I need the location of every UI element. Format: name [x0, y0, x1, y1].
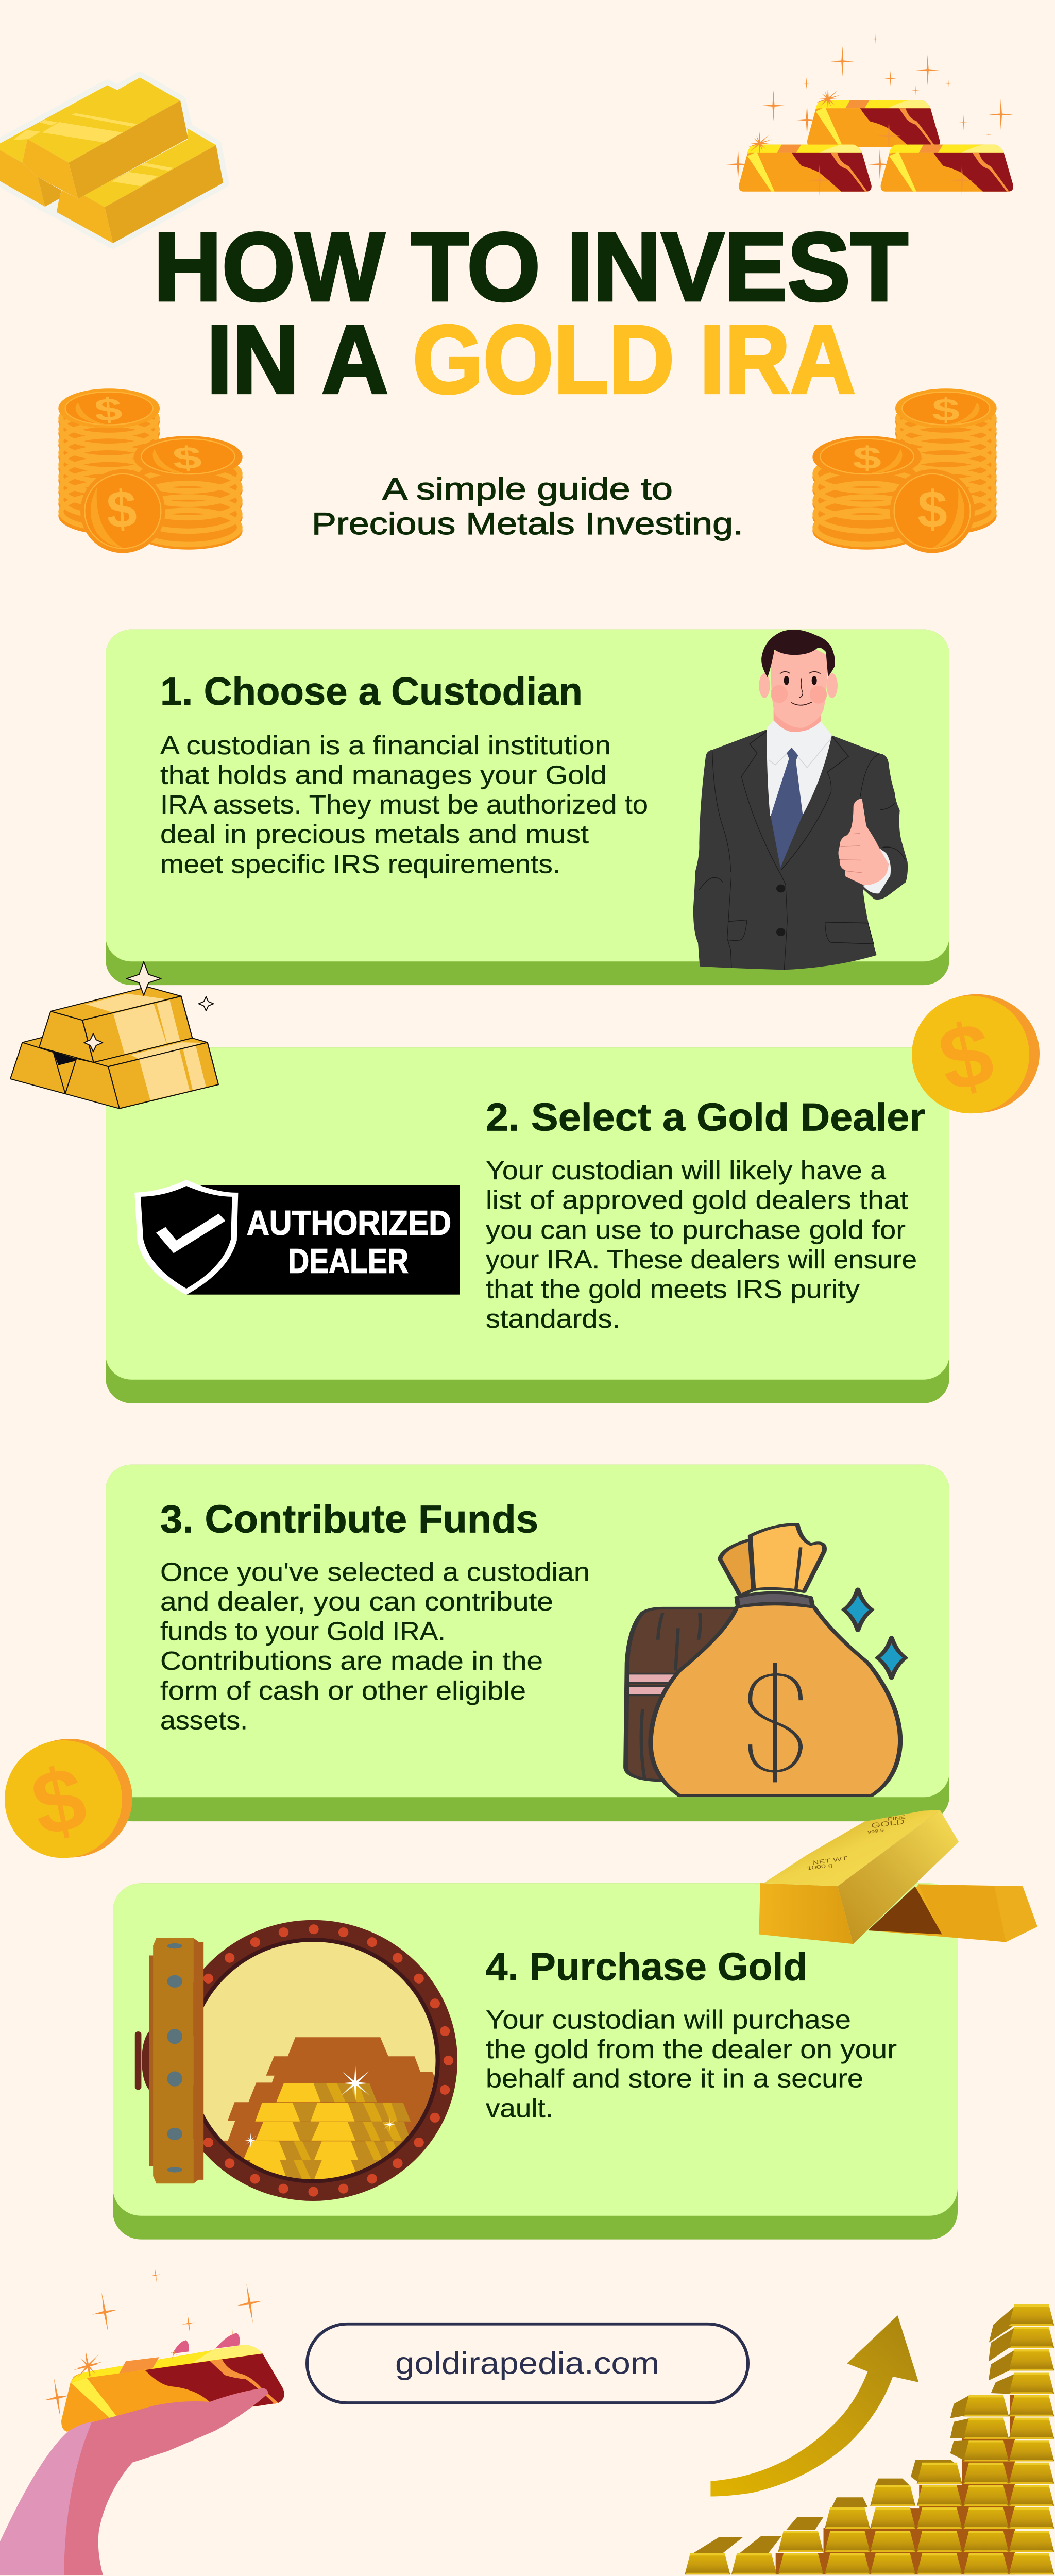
bag body	[651, 1604, 900, 1795]
body step 1: A custodian is a financial institution	[160, 730, 611, 760]
coin dollar signs left: $	[171, 439, 203, 476]
coin dollar sign: $	[930, 1003, 1001, 1111]
icon: top-right red and gold bars with sparkles	[726, 33, 1013, 196]
icon: shield with check	[134, 1180, 238, 1295]
heading step 2: 2. Select a Gold Dealer	[486, 1095, 925, 1139]
title	[154, 213, 908, 414]
vault door hinge	[149, 1938, 203, 2183]
coin dollar signs left	[93, 392, 203, 539]
panel: step 1 choose a custodian	[106, 630, 949, 985]
website text: goldirapedia.com	[395, 2346, 659, 2380]
icon: gold coin left	[5, 1739, 132, 1858]
sparkles above bar	[41, 2267, 266, 2420]
icon: gold bar staircase	[685, 2304, 1054, 2574]
body step 4: Your custodian will purchase	[486, 2005, 851, 2034]
panel face step 2	[106, 1047, 949, 1380]
body step 1: that holds and manages your Gold	[160, 760, 607, 789]
panel: step 3 contribute funds	[106, 1465, 949, 1821]
panel base step 2	[106, 1047, 949, 1403]
panel base step 1	[106, 630, 949, 985]
coin dollar signs left: $	[105, 479, 138, 539]
face features	[784, 676, 789, 685]
body step 2: your IRA. These dealers will ensure	[486, 1244, 917, 1274]
suit	[693, 730, 908, 970]
badge text line 2: DEALER	[288, 1242, 409, 1281]
body step 4: the gold from the dealer on your	[486, 2035, 897, 2064]
vault ring	[168, 1920, 457, 2201]
body step 2: Your custodian will likely have a	[486, 1156, 886, 1185]
icon: right coin stacks	[812, 388, 997, 553]
coin dollar signs right: $	[932, 393, 960, 428]
heading step 3: 3. Contribute Funds	[160, 1497, 538, 1541]
icon: money bag and wallet	[626, 1524, 906, 1795]
cuff and hand	[863, 848, 891, 893]
badge black band	[186, 1185, 460, 1295]
subtitle line 1: A simple guide to	[382, 471, 673, 506]
icon: left coin stacks	[58, 388, 243, 553]
bag dollar symbol	[750, 1663, 801, 1782]
icon: open vault with gold	[135, 1920, 457, 2201]
hand	[64, 2388, 268, 2575]
body step 3: and dealer, you can contribute	[160, 1587, 553, 1616]
panel: step 4 purchase gold	[113, 1883, 958, 2240]
body step 1: IRA assets. They must be authorized to	[160, 790, 648, 819]
body step 4: vault.	[486, 2093, 553, 2123]
heading step 1: 1. Choose a Custodian	[160, 670, 583, 714]
coin dollar signs right: $	[853, 440, 881, 476]
gold glints	[242, 2063, 399, 2148]
arm	[0, 2421, 93, 2575]
title line 2: IN A	[207, 306, 388, 414]
heading step 4: 4. Purchase Gold	[486, 1945, 807, 1989]
body step 4: behalf and store it in a secure	[486, 2063, 863, 2093]
body step 3: funds to your Gold IRA.	[160, 1616, 446, 1646]
vault handle	[135, 2031, 149, 2090]
icon: top-left gold bars	[0, 77, 223, 243]
icon: rising gold arrow	[710, 2315, 918, 2496]
panel face step 3	[106, 1465, 949, 1797]
body step 2: you can use to purchase gold for	[486, 1215, 906, 1244]
icon: gold bars top of step 4	[759, 1810, 1037, 1944]
bar engraving: GOLD	[870, 1818, 906, 1830]
panel base step 4	[113, 1883, 958, 2240]
top faces and side faces	[692, 2304, 1017, 2554]
coin dollar sign left: $	[23, 1748, 94, 1855]
suit lines	[699, 731, 905, 970]
body step 3: assets.	[160, 1705, 248, 1735]
subtitle line 2: Precious Metals Investing.	[312, 506, 743, 541]
bar engraving: 999.9	[866, 1828, 885, 1835]
bag tufts	[720, 1539, 754, 1596]
body step 2: standards.	[486, 1304, 620, 1333]
body step 3	[160, 1557, 590, 1735]
icon: businessman giving thumbs up	[693, 630, 908, 970]
body step 4	[486, 2005, 897, 2123]
neck and head	[774, 709, 821, 732]
body step 2: list of approved gold dealers that	[486, 1185, 908, 1215]
body step 1	[160, 730, 648, 878]
body step 3: Once you've selected a custodian	[160, 1557, 590, 1586]
blue sparkle 2	[877, 1637, 906, 1679]
hair	[761, 630, 835, 677]
website link pill	[307, 2324, 748, 2403]
hinge bolts	[167, 1943, 182, 2173]
tie	[771, 748, 803, 868]
coin dollar signs right: $	[917, 480, 947, 538]
panel: step 2 select a gold dealer	[106, 1047, 949, 1403]
sparkles behind bars	[726, 33, 1013, 180]
sparkles over bar	[70, 2328, 236, 2386]
title line 2 highlight: GOLD IRA	[413, 306, 856, 414]
bar engraving: FINE	[887, 1814, 907, 1822]
title line 1: HOW TO INVEST	[154, 213, 908, 321]
blue sparkle 1	[844, 1589, 872, 1631]
bag band	[737, 1592, 813, 1607]
shirt and collar	[767, 720, 832, 816]
body step 2: that the gold meets IRS purity	[486, 1274, 860, 1303]
bar engraving: 1000 g	[806, 1862, 834, 1871]
coin dollar signs left: $	[93, 392, 124, 428]
body step 2	[486, 1156, 917, 1333]
gold pile	[222, 2037, 439, 2182]
coin dollar signs right	[853, 393, 960, 538]
badge text line 1: AUTHORIZED	[247, 1204, 451, 1242]
panel face step 4	[113, 1883, 958, 2216]
badge: authorized dealer	[134, 1180, 460, 1295]
wallet	[626, 1608, 743, 1781]
bar engraving: NET WT	[811, 1856, 849, 1866]
subtitle	[312, 471, 743, 541]
stacked bars	[685, 2553, 730, 2574]
body step 1: meet specific IRS requirements.	[160, 849, 560, 878]
body step 1: deal in precious metals and must	[160, 819, 589, 849]
icon: hand holding gold bar	[0, 2267, 284, 2575]
vault rivets	[203, 1924, 453, 2197]
panel face step 1	[106, 630, 949, 961]
body step 3: Contributions are made in the	[160, 1646, 543, 1675]
panel base step 3	[106, 1465, 949, 1821]
bar engraving	[806, 1814, 907, 1871]
fingers behind bar	[173, 2340, 189, 2353]
held gold bar	[61, 2345, 284, 2432]
shadows between bars	[776, 2395, 1015, 2574]
icon: gold bars with sparkles	[10, 962, 218, 1109]
body step 3: form of cash or other eligible	[160, 1675, 526, 1705]
icon: gold coin top right	[912, 994, 1040, 1113]
